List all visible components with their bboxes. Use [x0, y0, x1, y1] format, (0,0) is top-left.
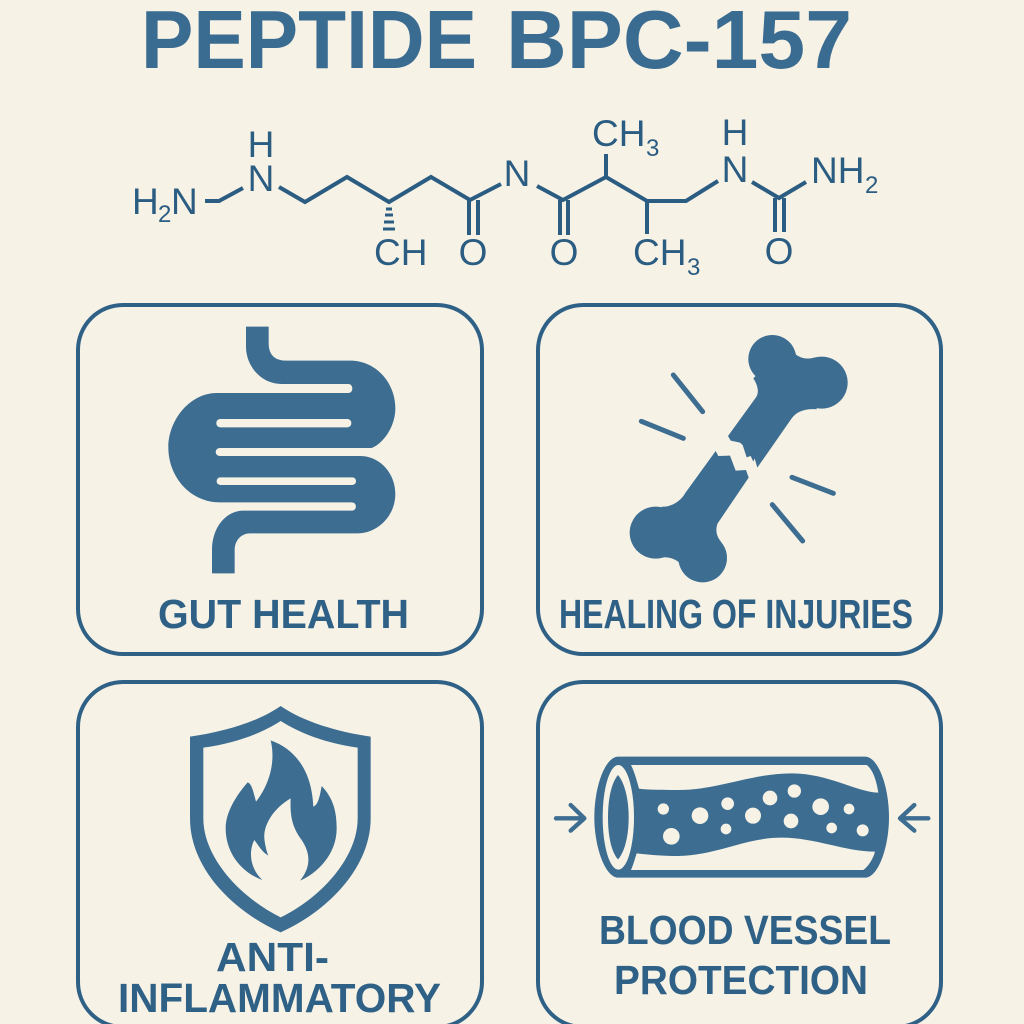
label: blood vessel protection: PROTECTION — [614, 957, 868, 1003]
molecule atom labels: O — [459, 232, 487, 273]
molecule atom labels: N — [248, 158, 274, 199]
panel frame — [538, 305, 941, 654]
molecule atom labels: 2 — [158, 201, 171, 228]
icon: intestine — [168, 327, 395, 573]
molecule atom labels: 3 — [687, 254, 700, 281]
molecule atom labels: N — [171, 181, 198, 222]
panel frame — [538, 682, 941, 1024]
molecule atom labels: CH — [633, 232, 686, 273]
arrow: right compression — [900, 805, 928, 831]
molecule atom labels: 3 — [646, 135, 659, 162]
molecule atom labels: H — [722, 112, 748, 153]
molecule atom labels: N — [504, 153, 530, 194]
molecule atom labels: NH — [811, 150, 864, 191]
label: blood vessel protection — [599, 907, 891, 1003]
molecule atom labels: O — [765, 231, 793, 272]
label: anti-inflammatory: ANTI- — [216, 934, 329, 980]
panel: healing of injuries — [538, 305, 941, 654]
panel frame — [78, 305, 482, 654]
label: blood vessel protection: BLOOD VESSEL — [599, 907, 891, 953]
panel: blood vessel protection — [538, 682, 941, 1024]
panel frame — [78, 682, 482, 1024]
molecule atom labels: H — [248, 124, 274, 165]
molecule diagram — [132, 112, 878, 281]
icon: shield with flame — [190, 706, 371, 932]
molecule atom labels: CH — [592, 113, 645, 154]
molecule atom labels: H — [132, 181, 159, 222]
icon: broken bone — [630, 335, 848, 582]
molecule atom labels: N — [722, 149, 748, 190]
molecule atom labels: O — [550, 232, 578, 273]
label: healing of injuries: HEALING OF INJURIES — [559, 591, 913, 637]
molecule atom labels: CH — [374, 232, 427, 273]
molecule atom labels: 2 — [865, 172, 878, 199]
title — [141, 0, 852, 86]
panel: anti-inflammatory — [78, 682, 482, 1024]
label: anti-inflammatory: INFLAMMATORY — [118, 975, 441, 1021]
panel: gut health — [78, 305, 482, 654]
label: anti-inflammatory — [118, 934, 441, 1021]
molecule bonds — [205, 154, 806, 235]
label: gut health: GUT HEALTH — [158, 591, 409, 637]
arrow: left compression — [556, 805, 584, 831]
icon: blood vessel — [556, 757, 928, 878]
molecule atom labels — [132, 112, 878, 281]
